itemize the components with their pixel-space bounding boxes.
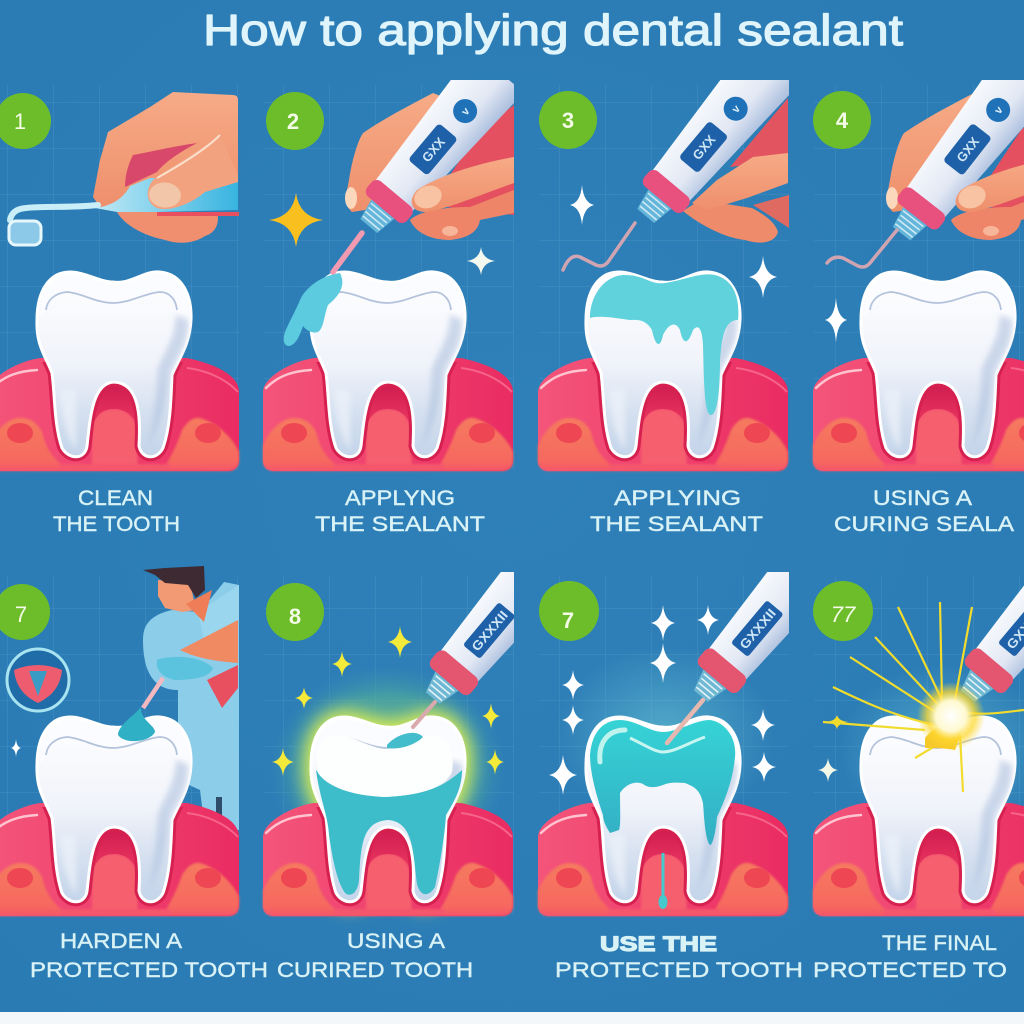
panel grid (814, 575, 1024, 915)
panel grid (264, 575, 514, 915)
caption 8 (813, 932, 1007, 982)
applicator 6 (410, 572, 514, 730)
caption 1: THE TOOTH (53, 513, 180, 536)
step number 3 (539, 91, 597, 149)
teal sealant coat 7 (590, 720, 735, 845)
applicator 7 (664, 572, 789, 746)
caption 3: APPLYING (614, 487, 741, 510)
caption 3 (590, 487, 763, 536)
bottom white strip (0, 1012, 1024, 1024)
tooth 5 (37, 717, 191, 902)
tooth 4 (861, 272, 1015, 457)
caption 7: PROTECTED TOOTH (555, 959, 803, 982)
caption 5: PROTECTED TOOTH (30, 959, 268, 982)
sealant coat 3 (590, 274, 738, 415)
caption 4: CURING SEALA (834, 513, 1014, 536)
caption 6: USING A (347, 930, 445, 953)
step number 6 (266, 583, 324, 641)
tooth 2 (311, 272, 465, 457)
gums 8 (813, 803, 1024, 916)
light burst (823, 602, 1024, 792)
tooth 7 (586, 717, 740, 902)
step number 4 (813, 91, 871, 149)
sparkles 6 (272, 626, 504, 776)
step number 1 (0, 93, 51, 149)
step number 8: 77 (831, 602, 856, 627)
sparkles 3 (570, 185, 777, 298)
caption 7: USE THE (600, 933, 717, 956)
gums 2 (263, 358, 513, 471)
panel 4: using a curing seala (813, 54, 1024, 536)
panel grid (264, 85, 514, 470)
caption 2: APPLYNG (345, 487, 455, 510)
sparkle 8 (818, 758, 838, 782)
step number 2 (266, 92, 324, 150)
gums 4 (813, 358, 1024, 471)
step number 8 (813, 581, 873, 641)
applicator 8 (961, 586, 1024, 702)
caption 1: CLEAN (78, 487, 153, 510)
gums 3 (538, 358, 788, 471)
caption 6 (277, 930, 473, 982)
sparkles 7 (549, 605, 776, 795)
caption 6: CURIRED TOOTH (277, 959, 473, 982)
caption 5 (30, 930, 268, 982)
panel 8: the final protected to (813, 550, 1024, 982)
drip in gums 7 (658, 853, 668, 909)
step number 2: 2 (287, 109, 299, 134)
gums 5 (0, 803, 239, 916)
soft glow 7 (555, 645, 775, 825)
caption 2 (315, 487, 485, 536)
panel 3: applying the sealant (536, 80, 790, 532)
step number 3: 3 (562, 108, 574, 133)
panel 1: clean the tooth (0, 85, 239, 536)
caption 2: THE SEALANT (315, 513, 485, 536)
caption 4 (834, 487, 1014, 536)
sparkle 5 (11, 739, 21, 757)
panel grid (0, 85, 239, 470)
gums 6 (263, 803, 513, 916)
applicator 3 (561, 80, 789, 272)
step number 5: 7 (15, 602, 27, 627)
green glow (270, 665, 506, 902)
caption 8: THE FINAL (882, 932, 997, 955)
caption 8: PROTECTED TO (813, 959, 1007, 982)
panel 2: applying the sealant (263, 50, 524, 536)
step number 5 (0, 584, 50, 640)
sparkles 2 (269, 193, 495, 275)
panel 6: using a cured tooth (261, 572, 515, 978)
step number 7: 7 (562, 608, 574, 633)
step number 6: 8 (289, 604, 301, 629)
caption 3: THE SEALANT (590, 513, 763, 536)
tooth 8 (861, 717, 1015, 902)
panel grid (539, 575, 789, 915)
tooth 3 (586, 272, 740, 457)
step number 4: 4 (836, 108, 849, 133)
caption 7 (555, 933, 803, 982)
panel grid (0, 575, 239, 915)
panel grid (814, 85, 1024, 470)
teal sealant fill 6 (316, 733, 462, 895)
sparkle 4 (825, 298, 847, 342)
sealant drop 5 (118, 707, 155, 741)
caption 5: HARDEN A (60, 930, 182, 953)
title: How to applying dental sealant (203, 6, 903, 55)
tooth 6 (311, 717, 465, 902)
panel 5: harden a protected tooth (0, 566, 268, 982)
dentist figure (143, 566, 239, 830)
caption 1 (53, 487, 180, 536)
icon: hand holding brush (9, 92, 239, 245)
gums 1 (0, 358, 239, 471)
soft glow 8 (840, 665, 1024, 835)
applicator 2 (330, 80, 514, 275)
icon: target badge (7, 649, 69, 711)
gums 7 (538, 803, 788, 916)
step number 7 (539, 581, 599, 641)
panel grid (539, 85, 789, 470)
tooth 1 (37, 272, 191, 457)
applicator 4 (825, 80, 1024, 269)
sealant blob 2 (284, 273, 342, 346)
caption 4: USING A (873, 487, 972, 510)
step number 1: 1 (14, 109, 26, 134)
panel 7: use the protected tooth (536, 572, 802, 978)
